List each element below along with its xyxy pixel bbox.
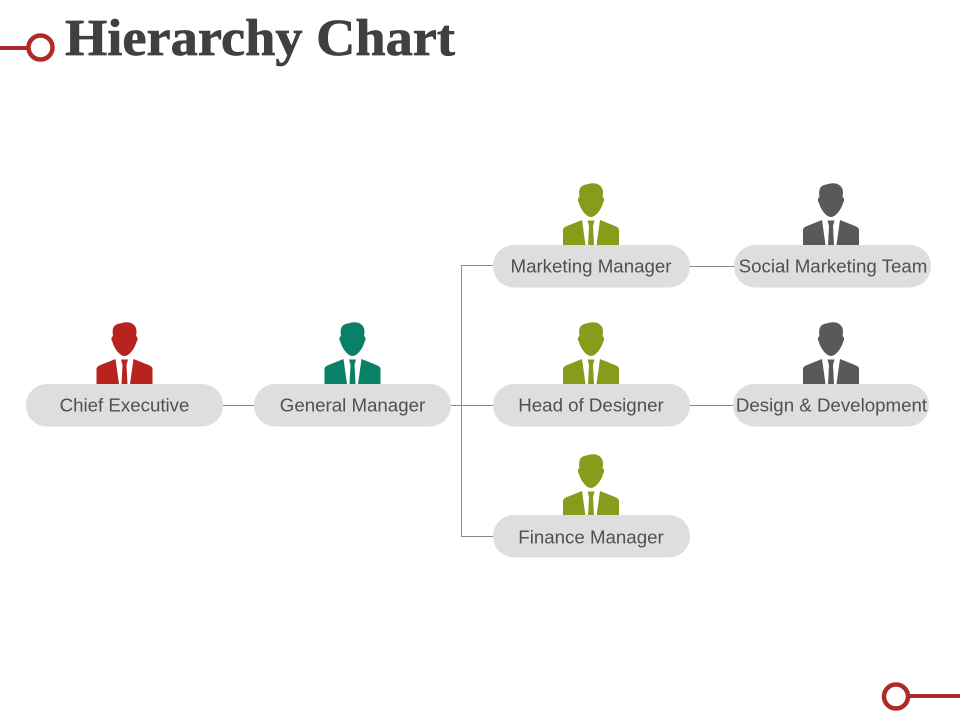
node: Head of Designer [493, 322, 690, 426]
icon: person teal [324, 322, 380, 384]
node: Marketing Manager [493, 183, 690, 288]
node: Chief Executive [26, 322, 223, 426]
label: Marketing Manager: Marketing Manager [510, 256, 672, 276]
label: Head of Designer: Head of Designer [518, 394, 664, 416]
node: Finance Manager [493, 454, 690, 558]
label: Finance Manager: Finance Manager [518, 526, 664, 548]
pill: General Manager [254, 384, 451, 426]
pill: Marketing Manager [493, 245, 690, 288]
node: Social Marketing Team [734, 183, 931, 288]
icon: person green [563, 183, 619, 245]
node: General Manager [254, 322, 451, 426]
title: Hierarchy Chart [65, 10, 456, 67]
pill: Chief Executive [26, 384, 223, 426]
icon: person green [563, 454, 619, 516]
pill: Finance Manager [493, 515, 690, 558]
label: Chief Executive: Chief Executive [60, 394, 189, 416]
label: General Manager: General Manager [280, 394, 425, 416]
pill: Design & Development [733, 384, 929, 426]
icon: top-left ring and line [0, 36, 52, 60]
label: Social Marketing Team: Social Marketing Team [739, 256, 927, 276]
icon: person gray [803, 183, 859, 245]
label: Design & Development: Design & Development [736, 394, 928, 416]
icon: person red [96, 322, 152, 384]
icon: person gray [803, 322, 859, 384]
node: Design & Development [733, 322, 929, 426]
icon: person green [563, 322, 619, 384]
connector lines [222, 266, 734, 536]
pill: Head of Designer [493, 384, 690, 426]
pill: Social Marketing Team [734, 245, 931, 288]
icon: bottom-right ring and line [884, 684, 960, 708]
